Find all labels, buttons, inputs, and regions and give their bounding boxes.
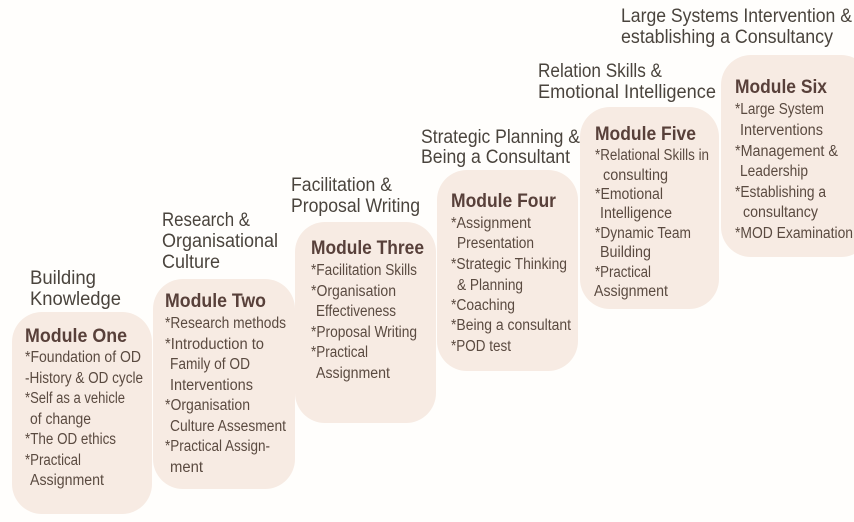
list: module five topics: Building [600, 244, 651, 261]
list: module three topics: *Practical [311, 344, 368, 361]
list: module three topics: *Organisation [311, 283, 396, 300]
list: module five topics: Intelligence [600, 205, 672, 222]
title: research and organisational culture [162, 210, 278, 273]
list: module two topics: Interventions [170, 377, 253, 394]
title: building knowledge [30, 268, 121, 310]
list: module four topics: & Planning [457, 277, 523, 294]
list: module three topics: *Facilitation Skills [311, 262, 417, 279]
list: module three topics: Effectiveness [316, 303, 396, 320]
list: module two topics [165, 315, 287, 476]
title: research and organisational culture: Culture [162, 252, 220, 273]
list: module one topics: *Foundation of OD [25, 349, 141, 366]
title: facilitation and proposal writing: Proposal Writing [291, 196, 420, 217]
list: module one topics [25, 349, 143, 489]
list: module four topics: *Strategic Thinking [451, 256, 567, 273]
heading: module six: Module Six [735, 77, 827, 98]
list: module five topics: consulting [603, 167, 668, 184]
title: strategic planning and being a consultant: Strategic Planning & [421, 127, 580, 148]
title: building knowledge: Knowledge [30, 289, 121, 310]
heading: module five: Module Five [595, 124, 696, 145]
list: module five topics: Assignment [594, 283, 669, 300]
list: module five topics [594, 147, 709, 300]
list: module three topics: Assignment [316, 365, 391, 382]
heading: module one: Module One [25, 326, 127, 347]
title: research and organisational culture: Organisational [162, 231, 278, 252]
list: module four topics: *Being a consultant [451, 317, 572, 334]
list: module one topics: of change [30, 411, 91, 428]
list: module two topics: *Organisation [165, 397, 250, 414]
list: module five topics: *Dynamic Team [595, 225, 691, 242]
panel: module four [437, 170, 578, 371]
list: module four topics: *Assignment [451, 215, 532, 232]
list: module two topics: Culture Assesment [170, 418, 287, 435]
panel: module six [721, 55, 854, 257]
title: building knowledge: Building [30, 268, 96, 289]
title: strategic planning and being a consultant: Being a Consultant [421, 147, 571, 168]
list: module five topics: *Emotional [595, 186, 663, 203]
list: module two topics: ment [170, 459, 204, 476]
list: module four topics: Presentation [457, 235, 534, 252]
list: module four topics: *POD test [451, 338, 512, 355]
list: module six topics: *Establishing a [735, 184, 826, 201]
list: module two topics: *Research methods [165, 315, 286, 332]
title: facilitation and proposal writing: Facilitation & [291, 175, 392, 196]
panel: module one [12, 312, 152, 514]
list: module four topics [451, 215, 572, 355]
title: relation skills and emotional intelligence: Relation Skills & [538, 61, 662, 82]
panel: module three [295, 222, 436, 423]
title: relation skills and emotional intelligence [538, 61, 716, 103]
title: strategic planning and being a consultant [421, 127, 580, 168]
list: module five topics: *Practical [595, 264, 651, 281]
list: module one topics: *The OD ethics [25, 431, 116, 448]
list: module six topics: *Large System [735, 101, 824, 118]
title: large systems intervention and establishing a consultancy: establishing a Consultancy [621, 27, 833, 48]
list: module one topics: Assignment [30, 472, 105, 489]
list: module five topics: *Relational Skills in [595, 147, 709, 164]
title: large systems intervention and establishing a consultancy [621, 6, 852, 48]
list: module six topics: *Management & [735, 143, 839, 160]
list: module two topics: *Practical Assign- [165, 438, 270, 455]
list: module one topics: *Practical [25, 452, 81, 469]
heading: module three: Module Three [311, 238, 424, 259]
heading: module two: Module Two [165, 291, 266, 312]
list: module six topics: Leadership [740, 163, 808, 180]
panel: module five [580, 107, 719, 309]
list: module six topics: Interventions [740, 122, 823, 139]
list: module six topics: consultancy [743, 204, 818, 221]
list: module six topics [735, 101, 853, 242]
list: module one topics: -History & OD cycle [25, 370, 143, 387]
panel: module two [153, 279, 295, 489]
title: research and organisational culture: Research & [162, 210, 250, 231]
list: module three topics [311, 262, 417, 382]
list: module one topics: *Self as a vehicle [25, 390, 125, 407]
heading: module four: Module Four [451, 191, 557, 212]
list: module two topics: *Introduction to [165, 336, 264, 353]
title: facilitation and proposal writing [291, 175, 420, 217]
title: relation skills and emotional intelligence: Emotional Intelligence [538, 82, 716, 103]
list: module three topics: *Proposal Writing [311, 324, 417, 341]
list: module four topics: *Coaching [451, 297, 515, 314]
list: module two topics: Family of OD [170, 356, 250, 373]
